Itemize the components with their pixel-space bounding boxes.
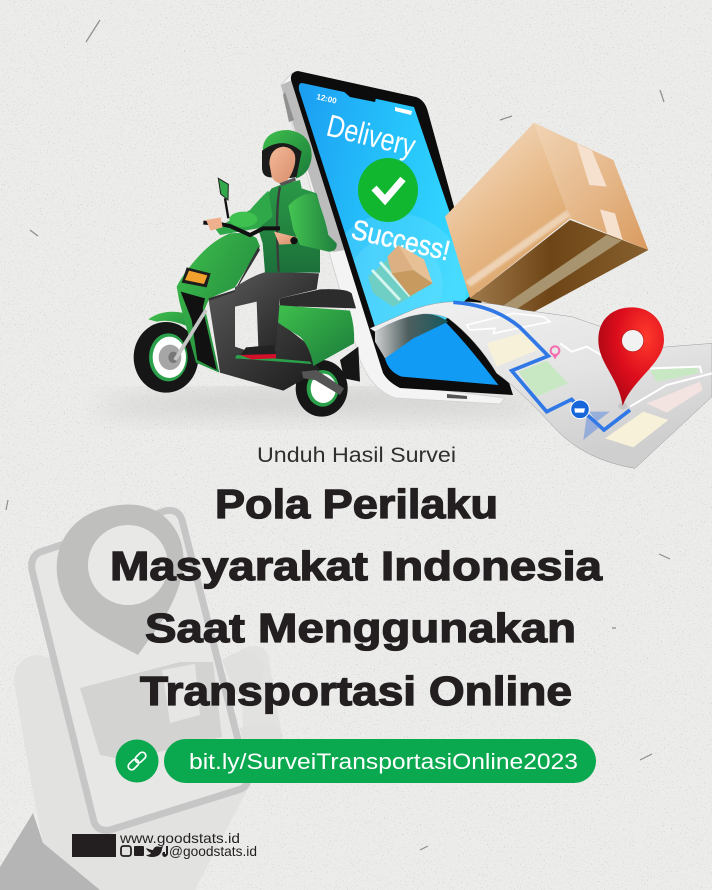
grip <box>290 237 298 244</box>
pink map marker <box>551 346 559 359</box>
ground shadow <box>95 390 545 426</box>
handle cover <box>229 212 257 227</box>
notch <box>342 90 376 102</box>
scooter <box>134 233 360 417</box>
rear body panel <box>277 305 354 366</box>
far arm <box>215 191 273 235</box>
ghost phone <box>32 510 248 830</box>
logo block <box>72 834 116 857</box>
subtitle: Unduh Hasil Survei <box>257 444 456 467</box>
ghost hand <box>14 646 282 890</box>
map blocks <box>467 313 712 447</box>
map sheet <box>370 302 712 468</box>
box left face <box>445 123 570 298</box>
courier marker <box>571 400 610 440</box>
social icons <box>121 846 168 857</box>
smartphone <box>281 71 513 404</box>
rider jacket <box>253 180 328 273</box>
rear fairing <box>340 347 360 382</box>
right hand <box>274 232 297 245</box>
rider shoe <box>240 345 276 359</box>
near arm <box>288 193 337 252</box>
main heading: Masyarakat Indonesia <box>110 543 603 589</box>
link pill: bit.ly/SurveiTransportasiOnline2023 <box>189 749 578 774</box>
Success label: Success! <box>349 214 453 266</box>
main heading: Saat Menggunakan <box>145 605 576 651</box>
screen glow <box>345 214 467 326</box>
phone screen <box>299 83 476 358</box>
icon: link <box>116 740 158 782</box>
background illustration: hand holding phone <box>0 505 283 890</box>
handlebar <box>203 223 280 235</box>
route line <box>453 302 630 430</box>
mirror <box>218 178 228 218</box>
main heading: Transportasi Online <box>140 668 572 714</box>
link pill <box>164 739 596 783</box>
box bottom face <box>470 220 648 314</box>
success badge <box>358 158 418 222</box>
rider legs <box>235 272 319 347</box>
jacket zip <box>277 187 280 272</box>
motion stripes <box>368 257 417 307</box>
front fender <box>148 312 203 343</box>
ghost sleeve <box>0 813 100 890</box>
scooter front shell <box>177 233 260 373</box>
main heading: Pola Perilaku <box>215 481 498 527</box>
social handle: @goodstats.id <box>169 843 257 859</box>
phone speaker <box>447 394 467 399</box>
small parcel <box>387 245 433 296</box>
phone lower screen <box>385 320 498 385</box>
map curl <box>375 314 448 358</box>
big parcel box <box>445 123 648 314</box>
ghost parcel <box>80 662 222 760</box>
rear wheel <box>296 360 348 417</box>
box tape <box>502 235 622 309</box>
front wheel <box>134 322 198 393</box>
left hand <box>206 217 223 231</box>
rider <box>203 130 337 359</box>
rider head and helmet <box>262 130 312 186</box>
Delivery label: Delivery <box>323 108 419 164</box>
front fork <box>175 310 206 360</box>
light streak <box>465 210 570 287</box>
main heading <box>110 481 603 714</box>
headlight <box>182 267 211 287</box>
ghost fingers <box>222 651 283 751</box>
scooter seat <box>280 289 356 308</box>
phone body <box>291 71 513 395</box>
exhaust <box>302 370 344 395</box>
map paper <box>370 302 712 468</box>
website text: www.goodstats.id <box>119 830 240 846</box>
status bar: 12:00 <box>316 92 338 106</box>
box right face <box>534 123 648 250</box>
scooter floor body <box>208 290 320 391</box>
red location pin <box>598 307 664 409</box>
ghost location pin <box>57 505 184 655</box>
phone silver side <box>281 73 505 404</box>
